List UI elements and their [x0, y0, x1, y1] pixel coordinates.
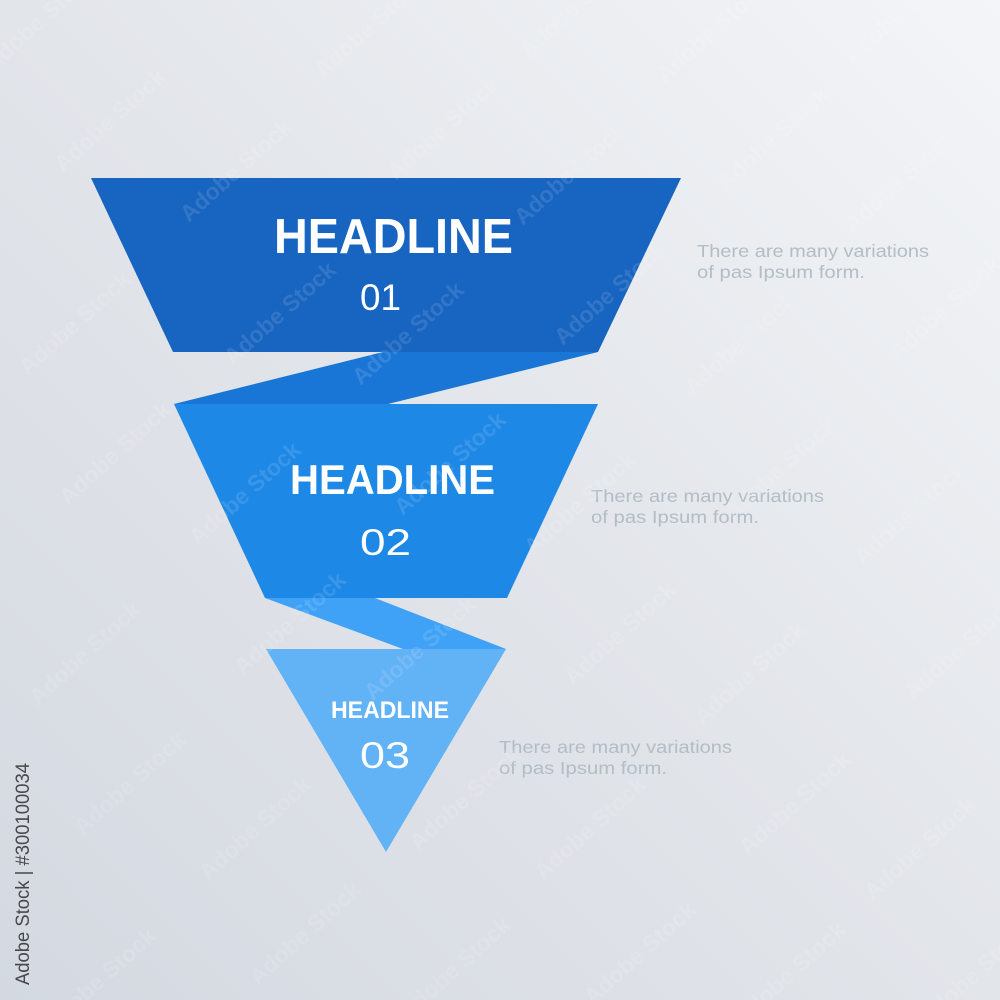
watermarks: Adobe Stock — [404, 741, 526, 855]
description 1: of pas Ipsum form. — [697, 262, 865, 282]
watermarks: Adobe Stock — [14, 266, 136, 380]
watermarks: Adobe Stock — [389, 406, 511, 520]
watermarks: Adobe Stock — [859, 791, 981, 905]
watermarks: Adobe Stock — [382, 71, 504, 185]
watermarks: Adobe Stock — [347, 276, 469, 390]
watermarks: Adobe Stock — [229, 566, 351, 680]
watermarks: Adobe Stock — [244, 876, 366, 990]
watermarks: Adobe Stock — [689, 616, 811, 730]
tier 2 number: 02 — [360, 522, 411, 563]
description 3: of pas Ipsum form. — [499, 758, 667, 778]
watermarks: Adobe Stock — [509, 116, 631, 230]
description 3 — [499, 737, 732, 778]
watermarks: Adobe Stock — [175, 113, 297, 227]
tier 3 number: 03 — [360, 735, 410, 776]
tier 3 shape — [266, 649, 506, 852]
tier 1 headline: HEADLINE — [274, 210, 513, 264]
description 2: There are many variations — [591, 486, 824, 506]
tier 1 shape — [91, 178, 681, 352]
funnel tier 1 — [91, 178, 681, 352]
watermarks: Adobe Stock — [69, 726, 191, 840]
tier 2 shape — [174, 404, 598, 598]
watermarks: Adobe Stock — [849, 456, 971, 570]
tier 2 headline: HEADLINE — [290, 456, 495, 503]
tier 3 headline: HEADLINE — [331, 697, 449, 724]
watermarks: Adobe Stock — [712, 81, 834, 195]
description 1 — [697, 241, 929, 282]
watermarks: Adobe Stock — [529, 771, 651, 885]
watermarks: Adobe Stock — [559, 576, 681, 690]
description 2 — [591, 486, 824, 527]
watermarks: Adobe Stock — [184, 436, 306, 550]
watermarks: Adobe Stock — [49, 63, 171, 177]
watermarks: Adobe Stock — [839, 124, 961, 238]
connector ribbon 2 — [265, 598, 506, 649]
stock id label: Adobe Stock | #300100034 — [13, 763, 34, 985]
watermarks: Adobe Stock — [54, 396, 176, 510]
watermarks: Adobe Stock — [219, 256, 341, 370]
watermarks: Adobe Stock — [719, 411, 841, 525]
watermarks: Adobe Stock — [519, 446, 641, 560]
connector ribbon 1 — [174, 352, 598, 404]
watermarks: Adobe Stock — [24, 596, 146, 710]
watermarks: Adobe Stock — [549, 236, 671, 350]
description 2: of pas Ipsum form. — [591, 507, 759, 527]
funnel tier 3 — [266, 649, 506, 852]
tier 1 number: 01 — [360, 277, 401, 318]
watermarks: Adobe Stock — [359, 591, 481, 705]
watermarks: Adobe Stock — [194, 771, 316, 885]
description 1: There are many variations — [697, 241, 929, 261]
watermarks: Adobe Stock — [734, 746, 856, 860]
description 3: There are many variations — [499, 737, 732, 757]
watermarks: Adobe Stock — [679, 286, 801, 400]
funnel tier 2 — [174, 404, 598, 598]
